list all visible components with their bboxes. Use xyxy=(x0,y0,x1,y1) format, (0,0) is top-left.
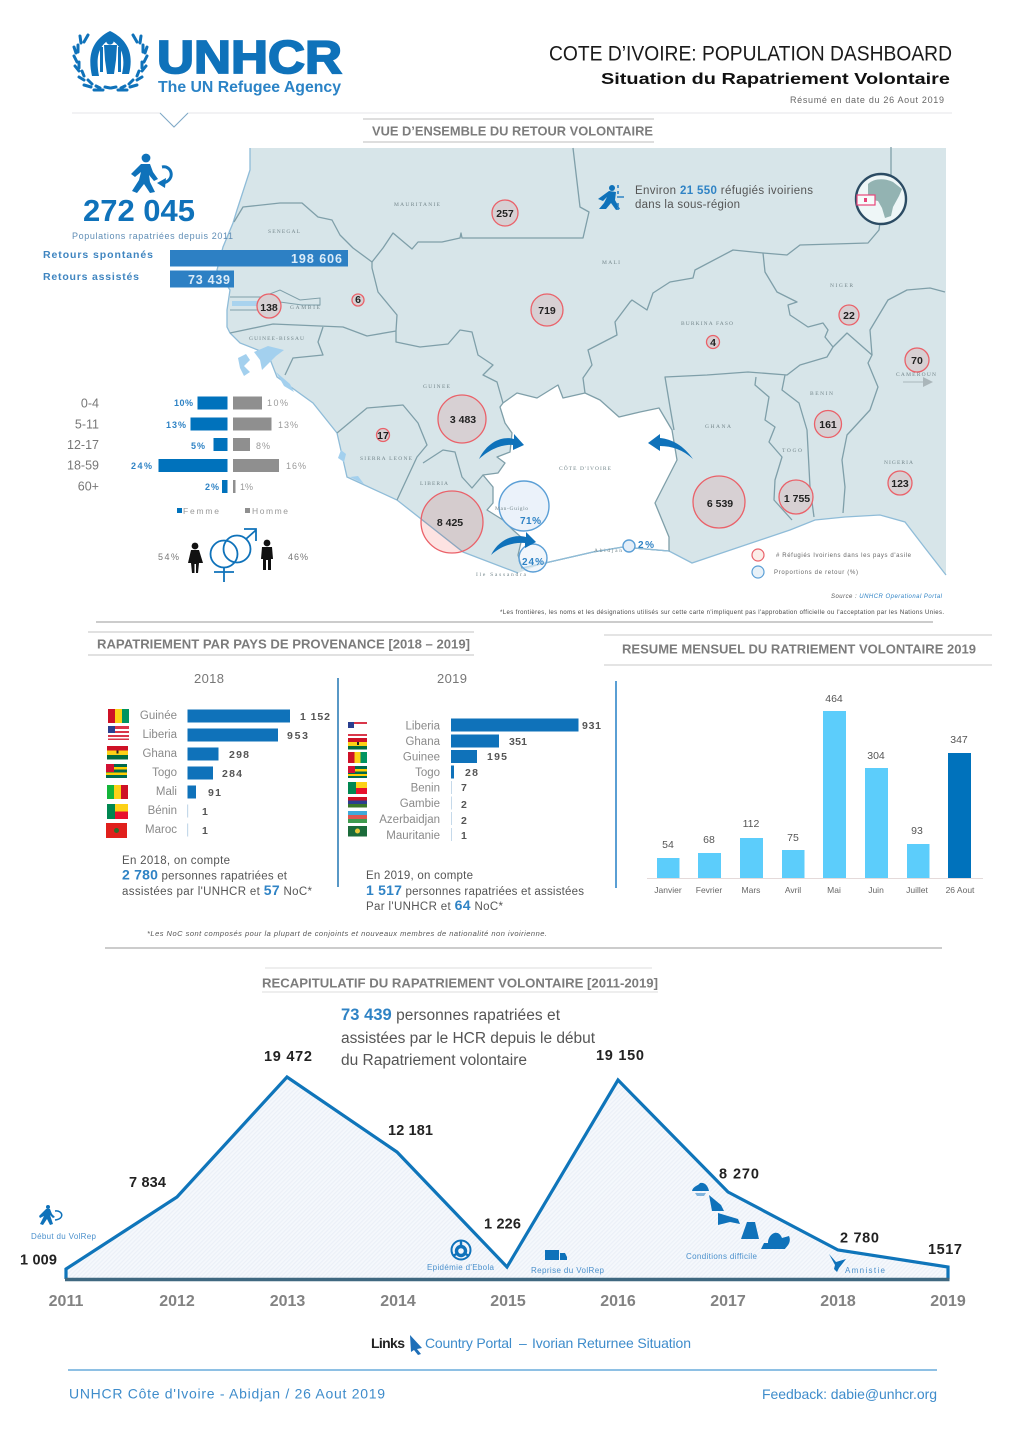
panel: 2018 by country: En 2018, on compte xyxy=(122,855,230,867)
callout: refugees in sub-region: Environ 21 550 réfugiés ivoiriens xyxy=(635,185,813,197)
disclaimer: *Les frontières, les noms et les désignations utilisés sur cette carte n'impliquent pas l'approbation officielle ou l'acceptation par les Nations Unies. xyxy=(500,610,944,616)
country borders xyxy=(230,147,945,520)
map labels: NIGERIA xyxy=(884,460,913,466)
bar: spontaneous returns: 198 606 xyxy=(291,252,342,266)
icon: Africa globe inset xyxy=(856,174,906,224)
tagline: The UN Refugee Agency xyxy=(158,79,341,96)
chart: annual area timeline xyxy=(20,1048,966,1310)
panel: 2019 by country: Gambie xyxy=(400,798,440,810)
chart: age and sex pyramid: 16% xyxy=(286,461,306,471)
map labels: Abidjan xyxy=(594,548,622,554)
arrow: return from Ghana xyxy=(648,434,693,459)
panel: 2019 by country: 1 xyxy=(461,830,467,842)
chart: annual area timeline: 1 009 xyxy=(20,1252,57,1268)
circle values: 123 xyxy=(891,478,909,490)
annotation: start of VolRep: Début du VolRep xyxy=(31,1232,97,1241)
arrow: return from Liberia xyxy=(491,532,536,555)
map labels: GUINEE-BISSAU xyxy=(249,336,304,342)
panel: 2019 by country: Benin xyxy=(411,782,440,794)
chart: annual area timeline: 19 472 xyxy=(264,1049,312,1065)
chart: age and sex pyramid: 10% xyxy=(267,398,288,408)
heading: monthly summary xyxy=(604,635,992,665)
panel: 2019 by country: En 2019, on compte xyxy=(366,870,473,882)
map labels: MALI xyxy=(602,260,620,266)
panel: 2019 by country: Mauritanie xyxy=(386,830,440,842)
links xyxy=(371,1335,691,1355)
chart: age and sex pyramid: 24% xyxy=(131,461,152,471)
chart: annual area timeline: 2019 xyxy=(930,1293,966,1310)
chart: monthly returns: 68 xyxy=(703,834,715,846)
map labels: NIGER xyxy=(830,283,853,289)
chart: annual area timeline: 12 181 xyxy=(388,1123,433,1139)
annotation: difficult conditions: Conditions difficile xyxy=(686,1252,758,1261)
panel: 2018 by country: Maroc xyxy=(145,824,177,836)
legend: sex xyxy=(177,506,288,516)
panel: 2018 by country: Ghana xyxy=(142,748,178,760)
panel: 2018 by country: Guinée xyxy=(140,710,177,722)
chart: monthly returns: 93 xyxy=(911,825,923,837)
annotation: start of VolRep xyxy=(31,1205,97,1241)
chart: annual area timeline: 2018 xyxy=(820,1293,856,1310)
chart: annual area timeline: 2014 xyxy=(380,1293,416,1310)
map legend xyxy=(752,549,912,578)
callout: total assisted: assistées par le HCR depuis le début xyxy=(341,1030,596,1047)
circle values: 6 539 xyxy=(707,498,733,510)
map labels xyxy=(249,202,936,578)
panel: total returns xyxy=(43,154,348,288)
panel: 2018 by country: 1 xyxy=(202,825,208,837)
footer xyxy=(69,1386,937,1402)
panel: 2018 by country: 91 xyxy=(208,787,221,799)
map labels: SIERRA LEONE xyxy=(360,456,413,462)
wordmark: UNHCR xyxy=(157,31,342,83)
chart: age and sex pyramid: 5% xyxy=(191,441,205,451)
panel: 2019 by country: Guinee xyxy=(403,752,440,764)
chart: monthly returns: Janvier xyxy=(654,885,682,895)
panel: 2018 by country: Togo xyxy=(152,767,177,779)
highlighted bar: August xyxy=(948,753,971,878)
panel: 2019 by country: 28 xyxy=(465,767,478,779)
chart: annual area timeline: 8 270 xyxy=(719,1166,759,1182)
panel: 2019 by country: Ghana xyxy=(405,736,441,748)
chart: monthly returns: 304 xyxy=(867,750,885,762)
circle values: 17 xyxy=(377,430,389,442)
legend: sex: Homme xyxy=(252,506,288,516)
chart: monthly returns: 75 xyxy=(787,832,799,844)
proportional circles: proportion of returns xyxy=(495,481,654,572)
panel: 2018 by country: 1 152 xyxy=(300,711,330,723)
icon: fleeing person xyxy=(598,185,624,210)
footnote: NoC: *Les NoC sont composés pour la plupart de conjoints et nouveaux membres de nationalité non ivoirienne. xyxy=(147,929,547,938)
callout: refugees in sub-region: dans la sous-région xyxy=(635,199,740,211)
flags 2018 xyxy=(106,709,129,838)
country: Côte d'Ivoire xyxy=(483,385,677,568)
circle values xyxy=(260,208,923,529)
icon: returning person xyxy=(131,154,171,193)
legend: sex: Femme xyxy=(183,506,219,516)
heading: vue d'ensemble xyxy=(363,119,654,142)
panel: 2018 by country: 953 xyxy=(287,730,308,742)
map labels: GHANA xyxy=(705,424,731,430)
callout: total assisted: du Rapatriement volontaire xyxy=(341,1052,527,1069)
arrow: return from Guinea xyxy=(479,434,524,459)
title block: Situation du Rapatriement Volontaire xyxy=(601,71,950,88)
callout: refugees in sub-region xyxy=(598,185,813,211)
icon: gender symbols xyxy=(210,529,256,582)
chart: age and sex pyramid: 10% xyxy=(174,398,193,408)
callout: total assisted xyxy=(341,1006,596,1069)
annotation: resumption of VolRep: Reprise du VolRep xyxy=(531,1266,605,1275)
map labels: LIBERIA xyxy=(420,481,448,487)
chart: monthly returns: Avril xyxy=(785,885,801,895)
heading: recap: RECAPITULATIF DU RAPATRIEMENT VOLONTAIRE [2011-2019] xyxy=(262,976,658,990)
chart: annual area timeline: 1517 xyxy=(928,1242,962,1258)
panel: 2018 by country: 298 xyxy=(229,749,249,761)
heading: recap xyxy=(262,968,658,992)
annotation: amnesty: Amnistie xyxy=(845,1266,886,1275)
circle values: 4 xyxy=(710,337,716,349)
circle values: 161 xyxy=(819,419,837,431)
icon: UNHCR emblem xyxy=(74,31,147,90)
chart: age and sex pyramid: 1% xyxy=(240,482,253,492)
chart: annual area timeline: 2016 xyxy=(600,1293,636,1310)
map labels: TOGO xyxy=(782,448,802,454)
icon: man xyxy=(261,540,273,570)
chart: annual area timeline: 7 834 xyxy=(129,1175,166,1191)
panel: 2019 by country: Liberia xyxy=(405,720,441,732)
circle values: 70 xyxy=(911,355,923,367)
circle values: 6 xyxy=(355,294,361,306)
chart: monthly returns: Mars xyxy=(742,885,760,895)
chart: annual area timeline: 19 150 xyxy=(596,1048,644,1064)
map labels: GAMBIE xyxy=(290,305,321,311)
panel: 2019 by country: Par l'UNHCR et 64 NoC* xyxy=(366,897,504,913)
circle values: 8 425 xyxy=(437,517,463,529)
panel: 2018 by country: Liberia xyxy=(142,729,178,741)
bar: assisted returns: 73 439 xyxy=(188,273,230,287)
chart: annual area timeline: 2013 xyxy=(270,1293,305,1310)
panel: 2018 by country: Bénin xyxy=(148,805,177,817)
panel: 2019 by country: 2 xyxy=(461,815,467,827)
links: Ivorian Returnee Situation xyxy=(532,1335,691,1351)
links: Links xyxy=(371,1335,405,1351)
map legend: Proportions de retour (%) xyxy=(774,570,858,576)
panel: 2018 by country: 2018 xyxy=(194,671,224,686)
chart: annual area timeline: 2017 xyxy=(710,1293,746,1310)
panel: 2019 by country: 195 xyxy=(487,751,507,763)
panel: 2019 by country: 1 517 personnes rapatriées et assistées xyxy=(366,882,584,898)
panel: 2018 by country: assistées par l'UNHCR et 57 NoC* xyxy=(122,882,313,898)
chart: annual area timeline: 2012 xyxy=(159,1293,195,1310)
panel: 2018 by country: 1 xyxy=(202,806,208,818)
chart: monthly returns: Mai xyxy=(827,885,841,895)
chart: monthly returns: 26 Aout xyxy=(946,885,975,895)
chart: age and sex pyramid xyxy=(67,396,308,582)
footer: Feedback: dabie@unhcr.org xyxy=(762,1386,937,1402)
chart: age and sex pyramid: 5-11 xyxy=(75,418,99,432)
panel: map xyxy=(217,147,946,578)
chart: age and sex pyramid: 12-17 xyxy=(67,438,99,452)
map labels: GUINEE xyxy=(423,384,451,390)
annotation: Ebola epidemic: Epidémie d'Ebola xyxy=(427,1263,495,1272)
chart: age and sex pyramid: 46% xyxy=(288,552,308,562)
panel: 2019 by country: 7 xyxy=(461,782,467,794)
chart: monthly returns: 464 xyxy=(825,693,843,705)
panel: 2018 by country: 2 780 personnes rapatriées et xyxy=(122,866,288,882)
chart: monthly returns: Juillet xyxy=(906,885,929,895)
flags 2019 xyxy=(348,722,367,836)
chart: annual area timeline: 2 780 xyxy=(840,1230,879,1246)
proportional circles: proportion of returns: 71% xyxy=(520,516,541,527)
chart: age and sex pyramid: 2% xyxy=(205,482,219,492)
map labels: SENEGAL xyxy=(268,229,301,235)
chart: monthly returns: Fevrier xyxy=(696,885,722,895)
proportional circles: proportion of returns: 24% xyxy=(522,557,544,568)
icon: cursor xyxy=(410,1335,422,1355)
arrow: Cameroon xyxy=(903,377,933,387)
circle values: 3 483 xyxy=(450,414,476,426)
chart: age and sex pyramid: 18-59 xyxy=(67,458,99,472)
key figure: 272 045 xyxy=(83,193,195,228)
panel: 2019 by country: 351 xyxy=(509,736,527,748)
panel: 2019 by country: 931 xyxy=(582,720,601,732)
panel: 2019 by country xyxy=(348,671,601,913)
chart: age and sex pyramid: 0-4 xyxy=(81,396,99,410)
chart: age and sex pyramid: 54% xyxy=(158,552,179,562)
chart: monthly returns: 347 xyxy=(950,734,968,746)
circle values: 257 xyxy=(496,208,514,220)
panel: 2018 by country: Mali xyxy=(156,786,177,798)
heading: repatriation by country xyxy=(88,632,474,655)
bar: spontaneous returns xyxy=(170,250,348,266)
chart: annual area timeline: 1 226 xyxy=(484,1216,521,1232)
title block: Résumé en date du 26 Aout 2019 xyxy=(790,95,944,105)
icon: woman xyxy=(188,543,203,573)
chart: monthly returns: 54 xyxy=(662,839,674,851)
panel: 2018 by country xyxy=(106,671,330,898)
logo: UNHCR xyxy=(74,31,342,96)
links: – xyxy=(519,1335,527,1351)
title block: COTE D’IVOIRE: POPULATION DASHBOARD xyxy=(549,42,952,66)
chart: monthly returns: Juin xyxy=(868,885,884,895)
title block xyxy=(549,42,952,105)
proportional circles: refugees per country xyxy=(257,200,929,553)
chart: annual area timeline: 2011 xyxy=(49,1293,83,1310)
map labels: MAURITANIE xyxy=(394,202,441,208)
circle values: 138 xyxy=(260,302,278,314)
annotation: amnesty xyxy=(829,1254,886,1275)
circle values: 22 xyxy=(843,310,855,322)
chart: age and sex pyramid: 13% xyxy=(278,420,298,430)
bar: assisted returns xyxy=(170,270,234,288)
panel: 2019 by country: 2 xyxy=(461,799,467,811)
panel: total returns: Populations rapatriées depuis 2011 xyxy=(72,231,233,241)
map labels: Ile Sassandra xyxy=(476,572,527,578)
panel: total returns: Retours assistés xyxy=(43,271,139,283)
heading: monthly summary: RESUME MENSUEL DU RATRIEMENT VOLONTAIRE 2019 xyxy=(622,642,976,656)
panel: 2018 by country: 284 xyxy=(222,768,242,780)
panel: 2019 by country: Azerbaidjan xyxy=(379,814,440,826)
chart: monthly returns xyxy=(647,693,983,895)
map legend: # Réfugiés Ivoiriens dans les pays d'asile xyxy=(776,553,912,559)
chart: age and sex pyramid: 60+ xyxy=(78,480,99,494)
chart: age and sex pyramid: 8% xyxy=(256,441,270,451)
links: Country Portal xyxy=(425,1335,512,1351)
heading: repatriation by country: RAPATRIEMENT PAR PAYS DE PROVENANCE [2018 – 2019] xyxy=(97,638,470,652)
panel: 2019 by country: 2019 xyxy=(437,671,467,686)
chart: monthly returns: 112 xyxy=(743,818,760,830)
footer: UNHCR Côte d'Ivoire - Abidjan / 26 Aout 2019 xyxy=(69,1386,385,1402)
annotation: difficult conditions xyxy=(686,1183,790,1261)
proportional circles: proportion of returns: Man-Guiglo xyxy=(495,506,528,512)
source note: Source : UNHCR Operational Portal xyxy=(831,594,943,600)
callout: total assisted: 73 439 personnes rapatriées et xyxy=(341,1006,561,1024)
panel: total returns: Retours spontanés xyxy=(43,249,153,261)
map labels: BENIN xyxy=(810,391,833,397)
chart: annual area timeline: 2015 xyxy=(490,1293,526,1310)
circle values: 719 xyxy=(538,305,556,317)
panel: 2019 by country: Togo xyxy=(415,767,440,779)
heading: vue d'ensemble: VUE D’ENSEMBLE DU RETOUR VOLONTAIRE xyxy=(372,124,653,138)
annotation: resumption of VolRep xyxy=(531,1250,605,1275)
proportional circles: proportion of returns: 2% xyxy=(638,540,654,551)
chart: age and sex pyramid: 13% xyxy=(166,420,186,430)
annotation: Ebola epidemic xyxy=(427,1240,495,1272)
map labels: CÔTE D'IVOIRE xyxy=(559,464,612,472)
circle values: 1 755 xyxy=(784,493,810,505)
map labels: BURKINA FASO xyxy=(681,321,733,327)
map labels: CAMEROUN xyxy=(896,372,936,378)
